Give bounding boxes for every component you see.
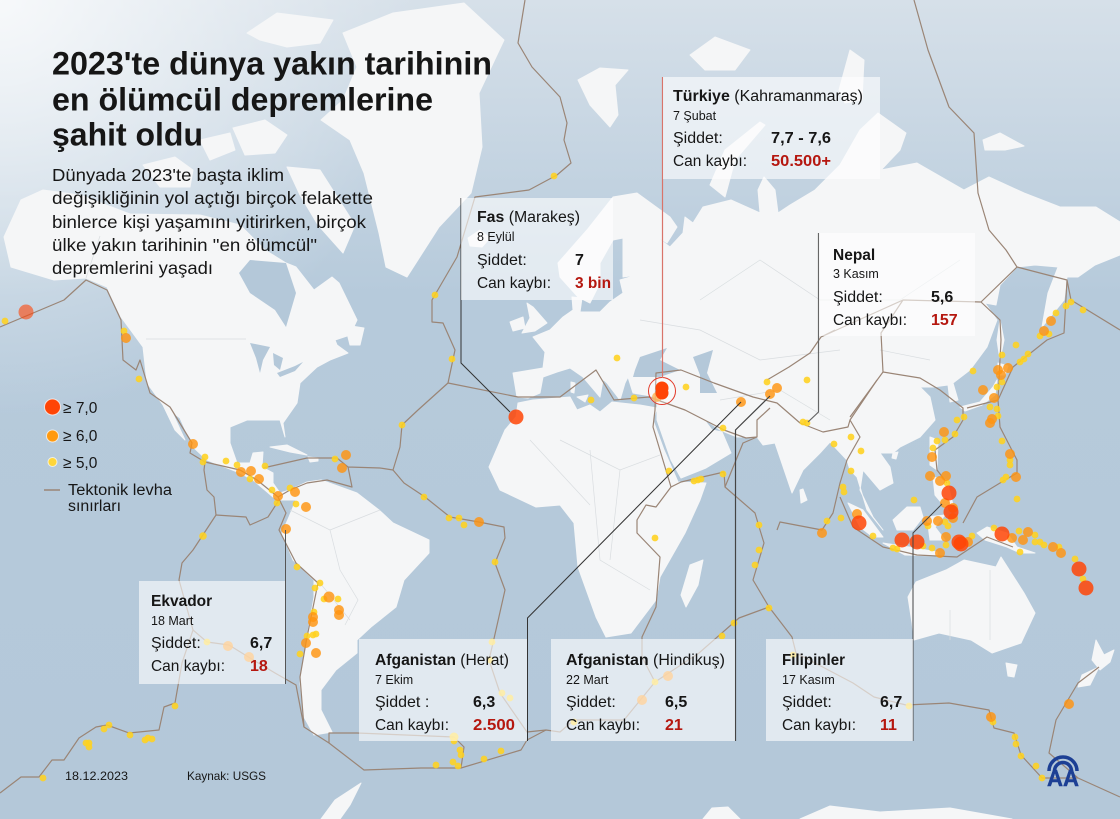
subtitle text [52,165,373,278]
panel: Afganistan Hindikuş: 6,5 [665,694,687,711]
land: islands of Asia and Oceania [468,37,1114,687]
title: en ölümcül depremlerine [52,82,433,118]
title: 2023'te dünya yakın tarihinin [52,46,492,82]
panel: Ekvador: Şiddet: [151,635,201,652]
panel: Fas [461,198,613,300]
panel: Afganistan Herat: 2.500 [473,717,515,734]
panel: Fas: Can kaybı: [477,275,551,292]
land: Africa [489,397,706,637]
panel: Afganistan Hindikuş: Afganistan (Hindikuş) [566,652,725,669]
footer date and source: Kaynak: USGS [187,769,266,783]
earthquake dots: magnitude 6+ [121,316,1074,722]
panel: Fas: Fas (Marakeş) [477,209,580,226]
panel: Nepal: 5,6 [931,289,953,306]
earthquake dots: magnitude 7+ [18,304,1094,596]
legend [44,399,172,515]
panel: Afganistan Herat: 7 Ekim [375,673,413,687]
panel: Afganistan Hindikuş: Şiddet: [566,694,616,711]
panel: Nepal: Şiddet: [833,289,883,306]
subtitle text: Dünyada 2023'te başta iklim [52,165,284,185]
panel: Afganistan Herat: 6,3 [473,694,495,711]
panel: Filipinler: Can kaybı: [782,717,856,734]
footer date and source [65,769,266,783]
panel: Fas: 3 bin [575,275,611,292]
panel: Filipinler: 6,7 [880,694,902,711]
panel: Afganistan Herat [359,639,527,741]
panel: Afganistan Hindikuş [551,639,735,741]
panel: Ekvador: 18 [250,658,268,675]
panel: Ekvador: Ekvador [151,593,212,610]
earthquake dots: magnitude 5+ [2,173,1086,781]
panel: Nepal: 3 Kasım [833,267,879,281]
legend: sınırları [68,498,121,515]
panel: Afganistan Hindikuş: 22 Mart [566,673,609,687]
panel: Ekvador: Can kaybı: [151,658,225,675]
panel: Türkiye [663,77,880,179]
panel: Filipinler: Şiddet: [782,694,832,711]
panel: Afganistan Herat: Can kaybı: [375,717,449,734]
subtitle text: ülke yakın tarihinin "en ölümcül" [52,235,317,255]
panel: Fas: 7 [575,252,584,269]
panel: Afganistan Herat: Şiddet : [375,694,429,711]
subtitle text: değişikliğinin yol açtığı birçok felakette [52,188,373,208]
panel: Afganistan Hindikuş: Can kaybı: [566,717,640,734]
panel: Fas: Şiddet: [477,252,527,269]
panel: Nepal: Can kaybı: [833,312,907,329]
legend: ≥ 7,0 [63,400,98,417]
panel: Türkiye: 50.500+ [771,153,831,170]
panel: Nepal [819,233,975,336]
leader lines [286,77,942,741]
land: Greenland [321,3,504,277]
panel: Filipinler: 17 Kasım [782,673,835,687]
panel: Türkiye: 7,7 - 7,6 [771,130,831,147]
land: Antarctica [321,783,1012,819]
Türkiye earthquake marker with ring [648,378,676,404]
panel: Ekvador: 6,7 [250,635,272,652]
panel: Filipinler [766,639,913,741]
panel: Afganistan Herat: Afganistan (Herat) [375,652,509,669]
subtitle text: binlerce kişi yaşamını yitirirken, birçok [52,212,366,232]
legend: ≥ 5,0 [63,455,98,472]
panel: Nepal: 157 [931,312,958,329]
panel: Ekvador: 18 Mart [151,614,194,628]
inland seas and lakes [239,260,717,393]
land: Eurasia [513,113,1120,530]
legend: Tektonik levha [68,482,172,499]
panel: Afganistan Hindikuş: 21 [665,717,683,734]
panel: Türkiye: Şiddet: [673,130,723,147]
panel: Nepal: Nepal [833,247,875,264]
country borders [86,236,990,640]
icon: AA logo: AA [1047,765,1079,791]
panel: Fas: 8 Eylül [477,230,515,244]
panel: Filipinler: Filipinler [782,652,845,669]
land: North and South America [4,13,429,735]
title: şahit oldu [52,116,203,152]
panel: Filipinler: 11 [880,717,897,734]
panel: Türkiye: Türkiye (Kahramanmaraş) [673,88,863,105]
legend: ≥ 6,0 [63,428,98,445]
panel: Ekvador [139,581,285,684]
panel: Türkiye: Can kaybı: [673,153,747,170]
subtitle text: depremlerini yaşadı [52,258,213,278]
panel: Türkiye: 7 Şubat [673,109,717,123]
footer date and source: 18.12.2023 [65,769,128,783]
title [52,46,492,152]
